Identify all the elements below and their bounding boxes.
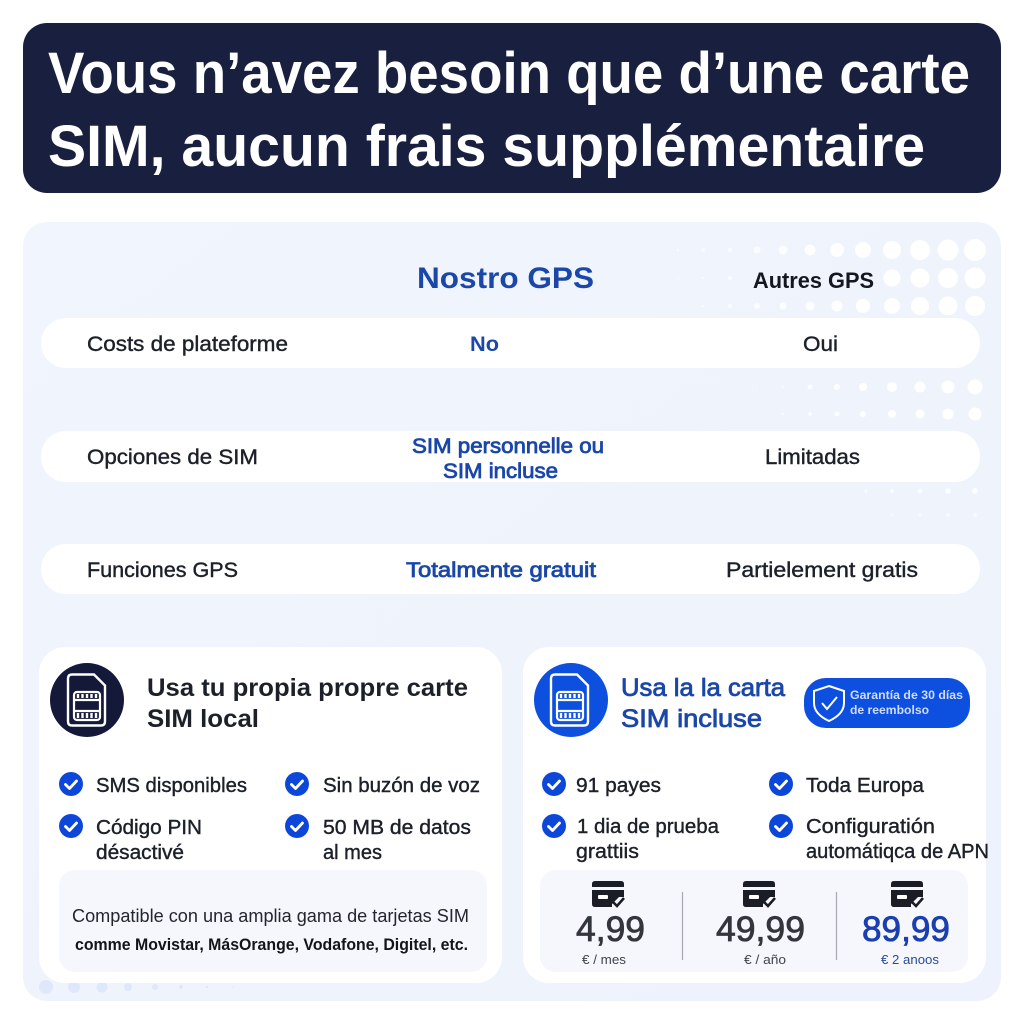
badge: money-back guarantee xyxy=(804,678,970,728)
price: monthly xyxy=(576,881,645,967)
feature list: own SIM xyxy=(59,772,480,864)
row: SIM options: Limitadas xyxy=(765,446,860,469)
feature list: included SIM: Toda Europa xyxy=(806,774,925,797)
price: yearly xyxy=(716,881,805,967)
pricing box xyxy=(540,870,968,972)
feature list: included SIM: 1 dia de prueba xyxy=(577,815,720,838)
badge: money-back guarantee: de reembolso xyxy=(850,705,929,717)
row: SIM options: SIM incluse xyxy=(443,460,558,483)
badge: money-back guarantee: Garantía de 30 días xyxy=(850,690,963,702)
title banner: SIM, aucun frais supplémentaire xyxy=(48,114,925,179)
feature list: own SIM: 50 MB de datos xyxy=(323,816,471,839)
icon: dark SIM xyxy=(50,663,124,737)
compatibility note: comme Movistar, MásOrange, Vodafone, Digitel, etc. xyxy=(75,936,468,954)
price: yearly: € / año xyxy=(744,953,786,967)
price: monthly: 4,99 xyxy=(576,910,645,949)
row: platform costs: Costs de plateforme xyxy=(87,333,288,356)
heading: own SIM: SIM local xyxy=(147,705,259,733)
row: SIM options: Opciones de SIM xyxy=(87,446,258,469)
row: GPS functions: Totalmente gratuit xyxy=(406,559,596,582)
price: two years: 89,99 xyxy=(862,910,950,949)
feature list: own SIM: désactivé xyxy=(96,841,184,864)
price: two years xyxy=(862,881,950,967)
panel: comparison background xyxy=(23,222,1001,1001)
column heading: Nostro GPS: Nostro GPS xyxy=(417,262,594,295)
row: GPS functions: Partielement gratis xyxy=(726,559,918,582)
row: GPS functions xyxy=(41,544,980,594)
heading: own SIM xyxy=(147,674,468,733)
feature list: included SIM xyxy=(542,772,989,863)
compatibility note: Compatible con una amplia gama de tarjetas SIM xyxy=(72,905,469,926)
panel: included SIM card xyxy=(523,647,989,983)
row: GPS functions: Funciones GPS xyxy=(87,559,238,582)
feature list: own SIM: al mes xyxy=(323,841,382,864)
title banner: Vous n’avez besoin que d’une carte xyxy=(48,41,970,106)
heading: included SIM: SIM incluse xyxy=(621,705,762,733)
row: platform costs: Oui xyxy=(803,333,838,356)
column heading: Autres GPS: Autres GPS xyxy=(753,268,874,293)
row: SIM options: SIM personnelle ou xyxy=(412,435,604,458)
feature list: own SIM: Código PIN xyxy=(96,816,202,839)
icon: blue SIM xyxy=(534,663,608,737)
row: platform costs xyxy=(41,318,980,368)
row: SIM options xyxy=(41,431,980,483)
feature list: included SIM: 91 payes xyxy=(576,774,661,797)
feature list: included SIM: automátiqca de APN xyxy=(806,840,989,863)
heading: included SIM xyxy=(621,674,785,733)
feature list: own SIM: SMS disponibles xyxy=(96,774,247,797)
heading: own SIM: Usa tu propia propre carte xyxy=(147,674,468,702)
panel: own SIM card xyxy=(39,647,502,983)
feature list: included SIM: grattiis xyxy=(576,840,639,863)
price: yearly: 49,99 xyxy=(716,910,805,949)
row: platform costs: No xyxy=(470,333,499,356)
compatibility note xyxy=(59,870,487,972)
heading: included SIM: Usa la la carta xyxy=(621,674,785,702)
feature list: included SIM: Configuratión xyxy=(806,815,935,838)
feature list: own SIM: Sin buzón de voz xyxy=(323,774,480,797)
title banner xyxy=(23,23,1001,193)
price: monthly: € / mes xyxy=(582,953,626,967)
price: two years: € 2 anoos xyxy=(881,953,939,967)
